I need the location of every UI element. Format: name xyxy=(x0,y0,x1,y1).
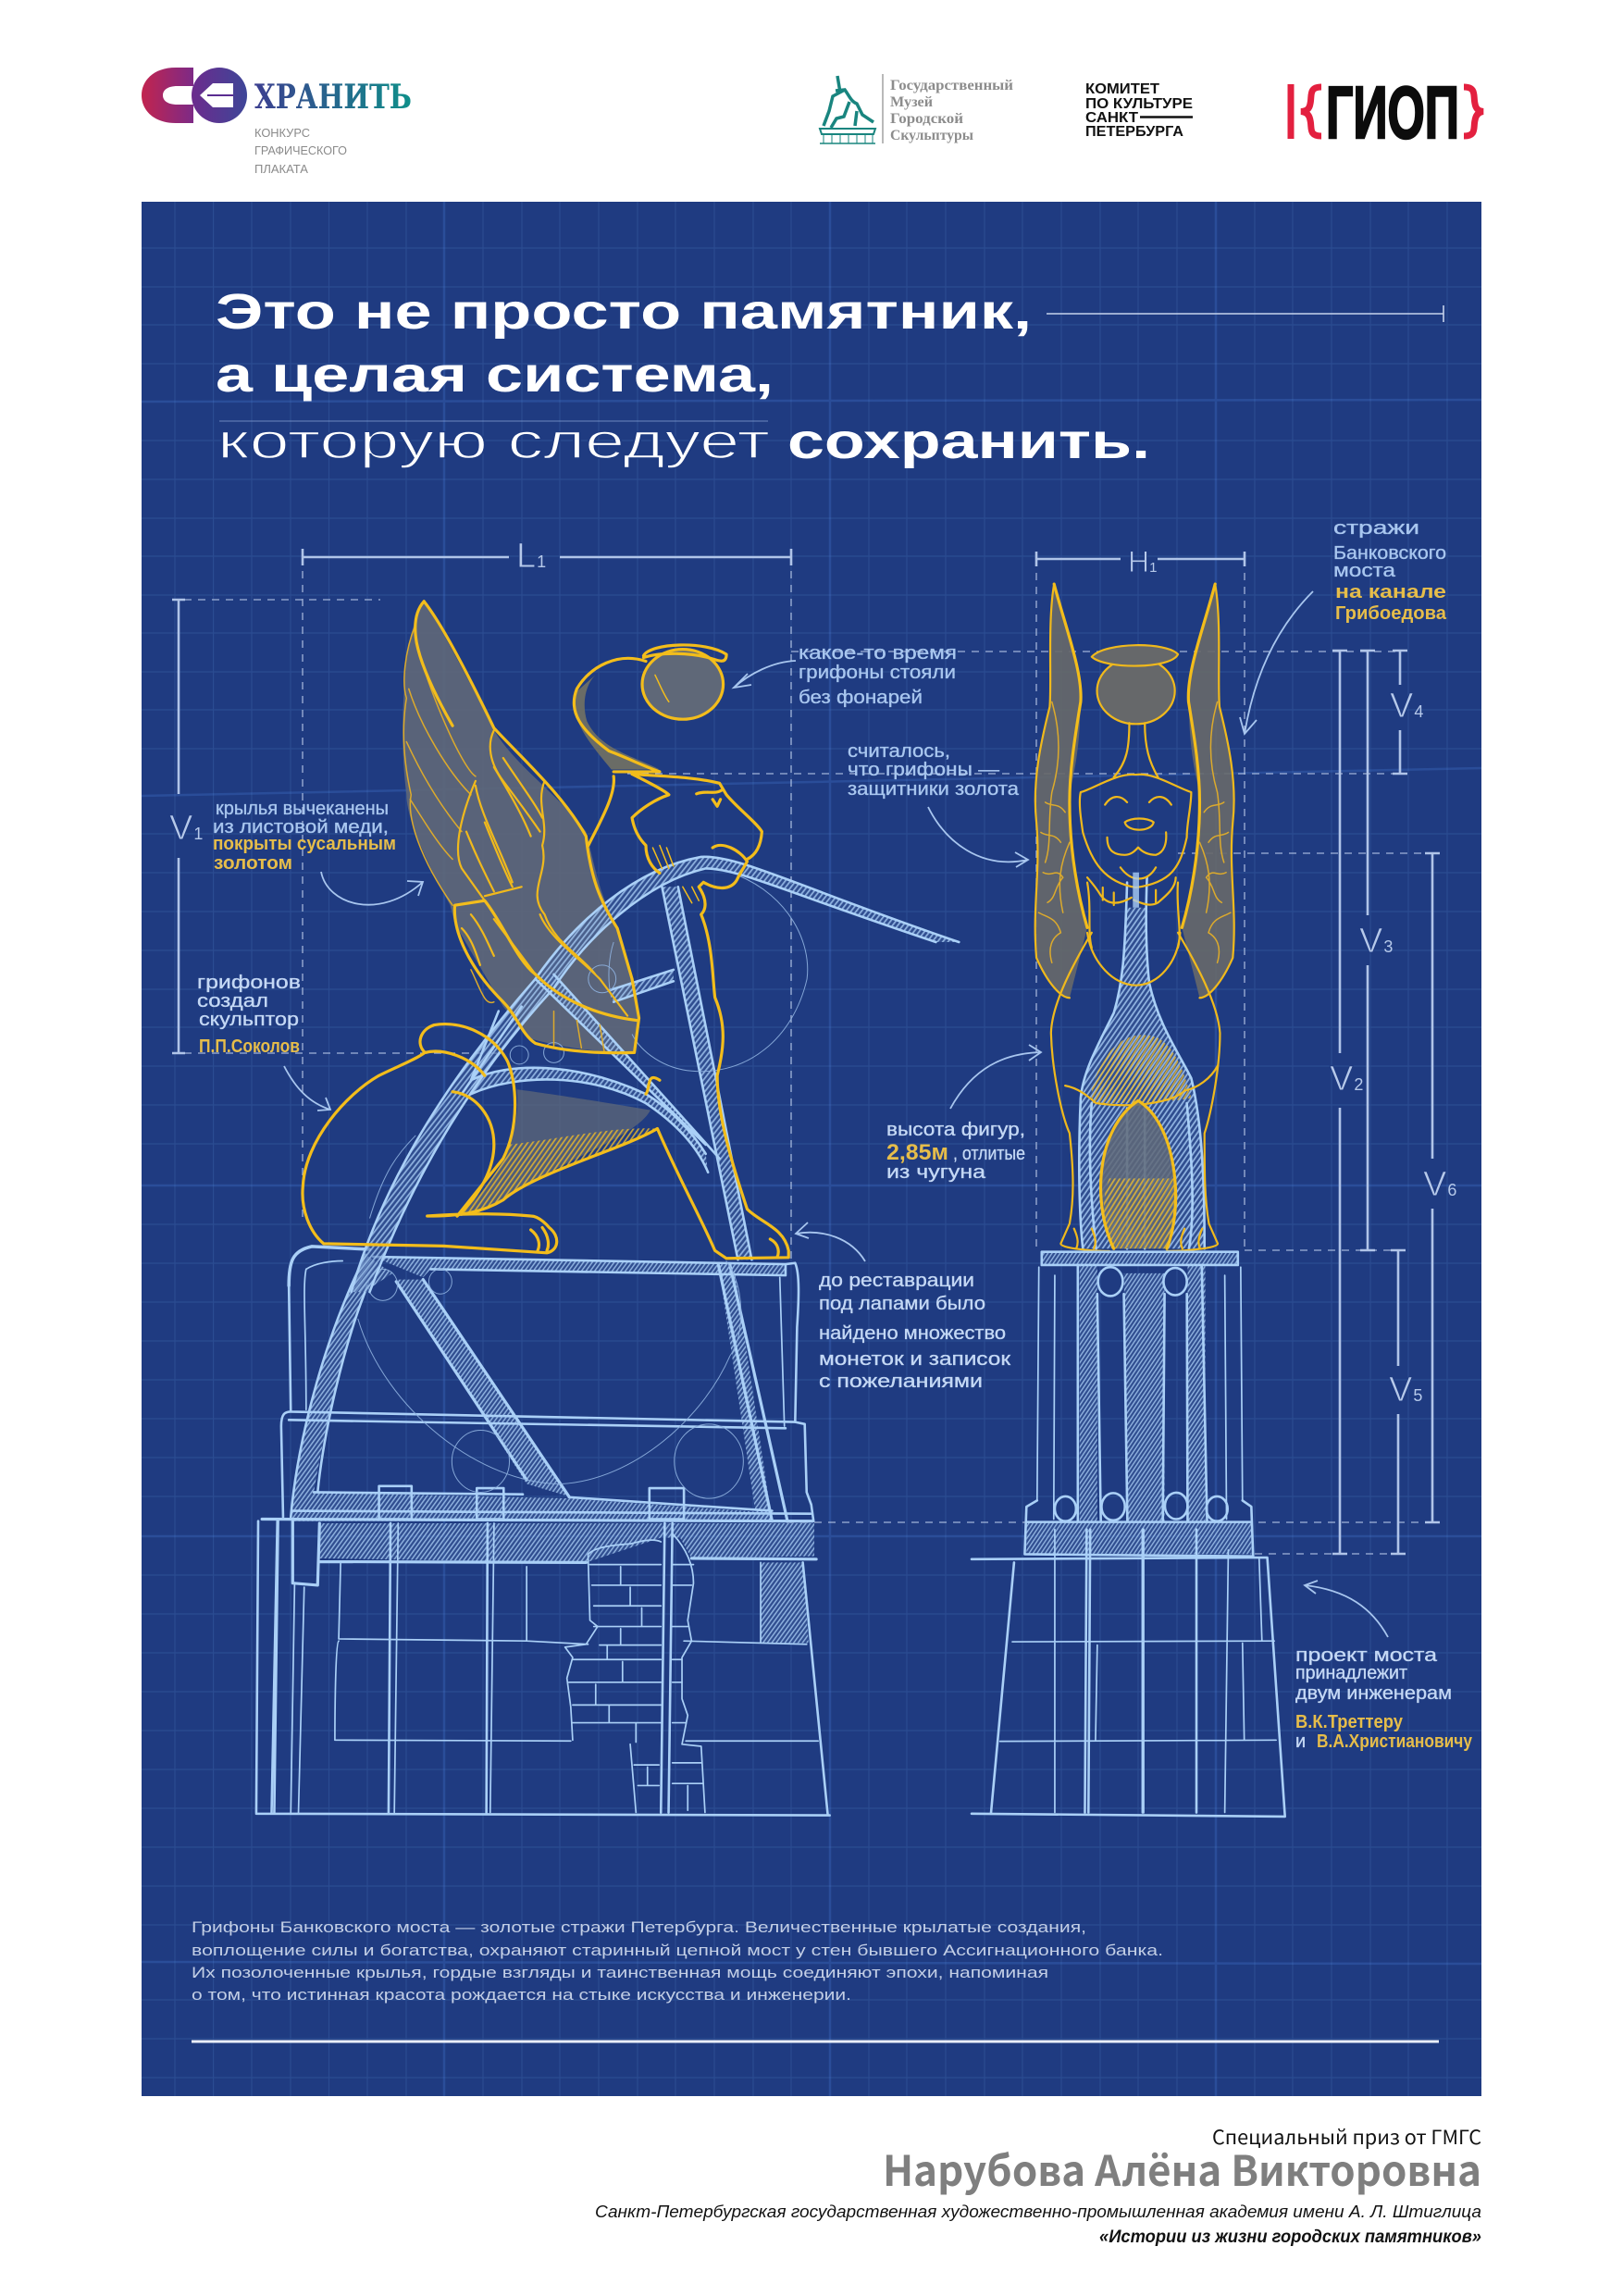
note: coins: до реставрации xyxy=(819,1271,974,1291)
front griffin belly arch xyxy=(1092,1035,1191,1248)
note: coins: найдено множество xyxy=(819,1323,1006,1344)
description paragraph: Их позолоченные крылья, гордые взгляды и таинственная мощь соединяют эпохи, напоминая xyxy=(192,1964,1048,1981)
note: defenders of gold xyxy=(848,741,1020,800)
museum name: Городской xyxy=(890,111,963,127)
icon: CO mark xyxy=(142,68,247,123)
note: wings xyxy=(213,799,396,874)
label H1: H1 xyxy=(1128,545,1157,578)
label V3: V3 xyxy=(1359,922,1393,961)
note: sculptor xyxy=(197,973,301,1057)
note: lanterns: какое-то время xyxy=(799,643,957,664)
prize line: Специальный приз от ГМГС xyxy=(1212,2123,1481,2151)
museum name: Скульптуры xyxy=(890,128,973,143)
footer credits xyxy=(595,2123,1481,2247)
heading line 1: Это не просто памятник, xyxy=(216,284,1032,340)
side base: bridge support drawing xyxy=(256,1247,830,1816)
note: guards: моста xyxy=(1333,561,1396,581)
front griffin head and body xyxy=(1051,775,1220,1251)
arrow: height xyxy=(950,1045,1041,1109)
logo: Committee for Culture xyxy=(1085,81,1193,140)
note: coins xyxy=(819,1271,1010,1392)
logo red brackets xyxy=(1291,84,1483,139)
series title: «Истории из жизни городских памятников» xyxy=(1099,2228,1481,2247)
label V6: V6 xyxy=(1423,1165,1456,1204)
note: engineers: и xyxy=(1295,1731,1306,1752)
front griffin wings xyxy=(1035,584,1234,998)
note: engineers: проект моста xyxy=(1295,1645,1438,1666)
note: engineers: двум инженерам xyxy=(1295,1683,1452,1704)
label L1: L1 xyxy=(516,537,546,576)
front griffin lamp xyxy=(1092,645,1178,777)
note: sculptor: П.П.Соколов xyxy=(199,1036,300,1057)
griffin lamp xyxy=(574,645,726,772)
note: sculptor: грифонов xyxy=(197,973,301,993)
note: height xyxy=(886,1120,1025,1183)
bottom rule xyxy=(192,2040,1439,2043)
note: guards: Грибоедова xyxy=(1335,603,1447,624)
logo wordmark: ХРАНИТЬ xyxy=(254,78,412,117)
griffin wing fill xyxy=(403,602,639,1052)
author name: Нарубова Алёна Викторовна xyxy=(883,2138,1481,2198)
front griffin pillar and hatch xyxy=(1079,877,1205,1248)
logo: Committee for Culture: ПЕТЕРБУРГА xyxy=(1085,124,1183,140)
heading line 3 bold: сохранить. xyxy=(787,414,1150,469)
arrow: wing xyxy=(321,872,423,905)
note: wings: золотом xyxy=(214,853,292,874)
griffin belly shading xyxy=(457,1089,650,1216)
note: height: 2,85м xyxy=(886,1140,948,1165)
arrow: paws xyxy=(796,1222,865,1261)
label V4: V4 xyxy=(1390,687,1423,726)
note: lanterns: грифоны стояли xyxy=(799,663,956,683)
griffin frame: arches and beams xyxy=(352,857,959,1292)
logo: State Museum of Urban Sculpture xyxy=(820,74,1013,143)
logo caption: КОНКУРС xyxy=(254,126,310,140)
museum name xyxy=(890,78,1013,143)
arrow: guardians xyxy=(1240,591,1313,734)
arrow: gold defenders xyxy=(928,807,1028,867)
note: defenders of gold: что грифоны — xyxy=(848,760,999,780)
logo caption: ПЛАКАТА xyxy=(254,162,308,176)
note: height: из чугуна xyxy=(886,1162,986,1183)
note: coins: с пожеланиями xyxy=(819,1371,983,1392)
note: engineers: принадлежит xyxy=(1295,1663,1407,1683)
note: guards: Банковского xyxy=(1333,543,1446,564)
poster panel xyxy=(142,202,1481,2096)
description paragraph xyxy=(192,1918,1163,2004)
note: lanterns: без фонарей xyxy=(799,688,923,708)
note: defenders of gold: защитники золота xyxy=(848,779,1020,800)
note: guards xyxy=(1333,518,1447,624)
front base: pedestal drawing xyxy=(972,1252,1285,1817)
note: sculptor: скульптор xyxy=(199,1010,299,1030)
arrow: griffon xyxy=(284,1066,330,1111)
logo: Committee for Culture: ПО КУЛЬТУРЕ xyxy=(1085,96,1193,112)
logo caption: ГРАФИЧЕСКОГО xyxy=(254,143,347,157)
museum divider xyxy=(882,74,884,143)
description paragraph: Грифоны Банковского моста — золотые стражи Петербурга. Величественные крылатые создания, xyxy=(192,1918,1086,1936)
heading xyxy=(216,284,1443,469)
academy: Санкт-Петербургская государственная художественно-промышленная академия имени А. Л. Штиглица xyxy=(595,2203,1481,2221)
note: guards: стражи xyxy=(1333,518,1419,539)
note: wings: крылья вычеканены xyxy=(216,799,389,819)
dimensions: front view xyxy=(1036,545,1456,1554)
griffin head and body outline xyxy=(303,774,788,1259)
icon: equestrian statue xyxy=(820,76,875,143)
note: defenders of gold: считалось, xyxy=(848,741,950,762)
museum name: Государственный xyxy=(890,78,1013,93)
note: height: , отлитые xyxy=(953,1144,1025,1164)
note: coins: монеток и записок xyxy=(819,1349,1010,1370)
description paragraph: о том, что истинная красота рождается на стыке искусства и инженерии. xyxy=(192,1986,851,2004)
note: sculptor: создал xyxy=(197,991,268,1011)
label V5: V5 xyxy=(1389,1371,1422,1409)
description paragraph: воплощение силы и богатства, охраняют старинный цепной мост у стен бывшего Ассигнационного банка. xyxy=(192,1942,1163,1959)
note: wings: из листовой меди, xyxy=(213,817,389,838)
dimensions: side view xyxy=(169,537,1437,1554)
heading line 2: а целая система, xyxy=(216,347,774,403)
note: height: высота фигур, xyxy=(886,1120,1025,1140)
note: lanterns xyxy=(799,643,957,708)
arrow: engineers xyxy=(1305,1581,1388,1637)
note: guards: на канале xyxy=(1335,582,1446,602)
logo caption xyxy=(254,126,347,176)
side griffin xyxy=(303,602,959,1292)
label V2: V2 xyxy=(1330,1060,1363,1098)
note: engineers xyxy=(1295,1645,1473,1752)
note: engineers: В.А.Христиановичу xyxy=(1317,1731,1473,1752)
logo black letters: ГИОП xyxy=(1326,71,1459,154)
lion hatch fine xyxy=(1130,873,1143,908)
logo: Committee for Culture: САНКТ xyxy=(1085,110,1138,126)
note: engineers: В.К.Треттеру xyxy=(1295,1712,1404,1732)
label V1: V1 xyxy=(169,809,203,848)
logo: Сохранить contest xyxy=(142,68,412,176)
heading line 3 thin: которую следует xyxy=(217,414,770,469)
heading rule xyxy=(1047,305,1443,322)
logo: Committee for Culture: КОМИТЕТ xyxy=(1085,81,1159,97)
note: coins: под лапами было xyxy=(819,1294,985,1314)
arrow: lamp xyxy=(734,661,796,688)
note: wings: покрыты сусальным xyxy=(213,834,396,854)
front griffin xyxy=(1035,584,1234,1251)
logo: КГИОП xyxy=(1291,71,1483,154)
griffin wing feathers xyxy=(403,602,639,1053)
museum name: Музей xyxy=(890,94,933,110)
